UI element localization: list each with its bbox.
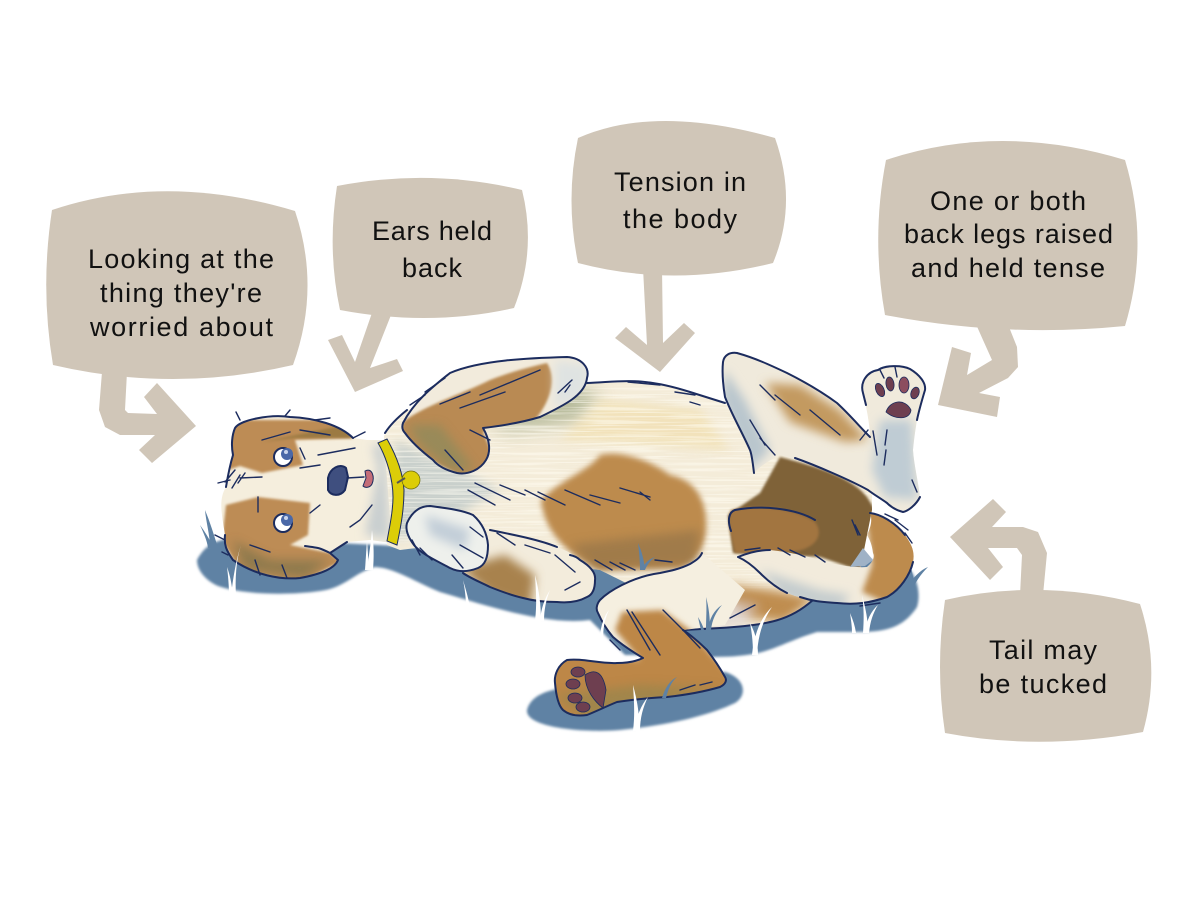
back grass blades xyxy=(200,510,928,592)
callout text: worried about xyxy=(89,312,273,342)
head xyxy=(215,410,392,582)
callout text: Tension in xyxy=(614,167,746,197)
callout text: Tail may xyxy=(989,635,1098,665)
callout text: back xyxy=(402,253,462,283)
callout text: and held tense xyxy=(911,253,1105,283)
callout text: One or both xyxy=(930,186,1086,216)
callout shape xyxy=(333,178,528,318)
lower front arm xyxy=(460,530,595,610)
arrow to tail xyxy=(950,499,1047,595)
dog illustration xyxy=(215,353,925,725)
arrow to raised leg xyxy=(938,322,1018,417)
callout shape xyxy=(572,121,786,276)
front grass blades xyxy=(227,530,878,731)
mid grass blades xyxy=(638,543,722,698)
white front paw xyxy=(406,506,488,571)
callout: ears held back xyxy=(328,178,528,392)
arrow to ears xyxy=(328,310,403,392)
callout: tension in the body xyxy=(572,121,786,372)
callout shape xyxy=(940,590,1151,742)
tongue xyxy=(363,470,373,487)
callout: tail may be tucked xyxy=(940,499,1151,742)
callout shape xyxy=(878,141,1138,330)
yellow collar and bell xyxy=(378,439,420,545)
ground shadow xyxy=(197,538,919,731)
infographic: dog rolled on its back xyxy=(46,121,1152,742)
paw pads: foot xyxy=(566,667,606,712)
arrow to eyes xyxy=(99,372,196,463)
callout: looking at the thing xyxy=(46,191,308,463)
callout text: thing they're xyxy=(100,278,262,308)
paw pads: raised paw xyxy=(873,377,921,418)
eye: lower xyxy=(274,514,293,532)
callout text: Ears held xyxy=(372,216,492,246)
lower head patch xyxy=(222,497,340,582)
upper front arm xyxy=(400,357,590,480)
callout: back legs raised xyxy=(878,141,1138,417)
callout text: back legs raised xyxy=(904,219,1113,249)
callout shape xyxy=(46,191,308,379)
upper head patch xyxy=(228,420,353,473)
nose xyxy=(328,466,348,495)
callout text: be tucked xyxy=(979,669,1107,699)
callout text: Looking at the xyxy=(88,244,274,274)
raised back leg and paw xyxy=(722,353,925,512)
lower back leg and foot xyxy=(545,553,745,725)
tail xyxy=(737,512,914,607)
dog torso xyxy=(380,375,880,635)
callout text: the body xyxy=(623,204,738,234)
arrow to body xyxy=(615,268,695,372)
torso outlines and fur xyxy=(385,381,815,630)
eye: upper xyxy=(274,448,293,466)
